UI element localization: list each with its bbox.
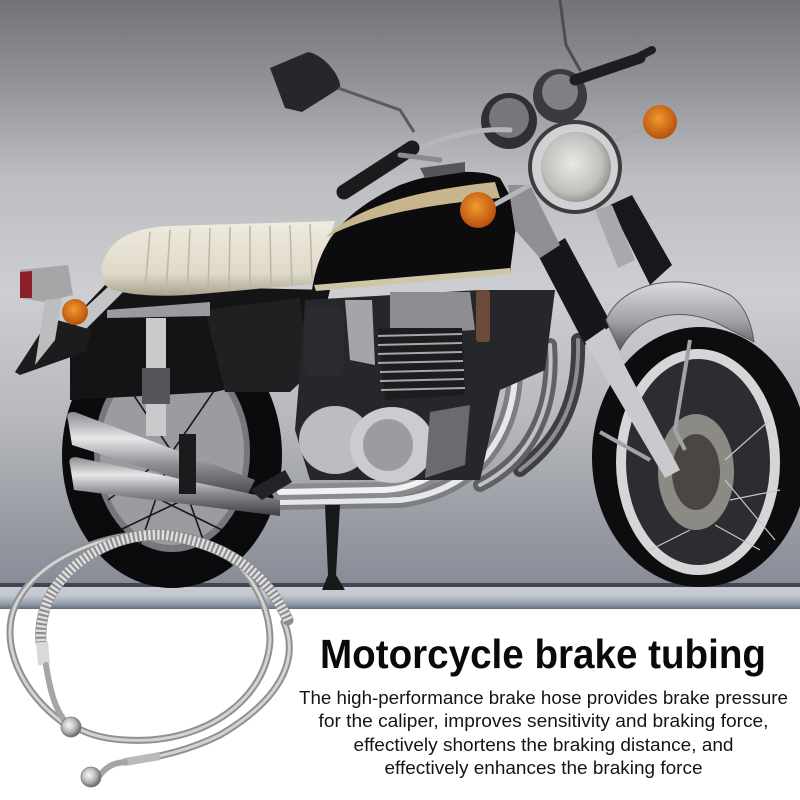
- tail light and plate: [15, 265, 92, 375]
- handlebars: [344, 0, 652, 192]
- fork boot and tubes: [508, 185, 680, 478]
- front wheel: [592, 327, 800, 587]
- kickstand: [322, 505, 345, 590]
- rear frame and shock: [70, 285, 330, 436]
- studio background: [0, 0, 800, 586]
- turn signals: [460, 105, 677, 228]
- mirror: [270, 52, 414, 132]
- description text: [299, 687, 788, 778]
- exhaust pipes: [280, 340, 578, 502]
- floor band: [0, 583, 800, 609]
- description text: effectively shortens the braking distance, and: [354, 734, 734, 755]
- fender stay: [600, 340, 690, 460]
- upper fitting and banjo: [42, 642, 81, 737]
- gauges: [481, 69, 587, 149]
- seat: [101, 221, 335, 296]
- mufflers: [67, 412, 292, 516]
- motorcycle: [15, 0, 800, 590]
- lower fitting and banjo: [81, 756, 160, 787]
- fuel tank: [312, 162, 518, 291]
- white lower panel: [0, 609, 800, 800]
- headlight: [528, 120, 622, 214]
- brake hose product: [10, 533, 289, 787]
- description text: for the caliper, improves sensitivity and braking force,: [318, 710, 768, 731]
- rear wheel: [62, 322, 282, 588]
- smooth hose: [10, 533, 289, 762]
- coiled spring guard: [41, 535, 288, 642]
- description text: effectively enhances the braking force: [384, 757, 702, 778]
- engine: [295, 290, 555, 483]
- front fender: [606, 282, 754, 350]
- description text: The high-performance brake hose provides brake pressure: [299, 687, 788, 708]
- seat pleats: [145, 224, 312, 294]
- title: Motorcycle brake tubing: [320, 631, 766, 677]
